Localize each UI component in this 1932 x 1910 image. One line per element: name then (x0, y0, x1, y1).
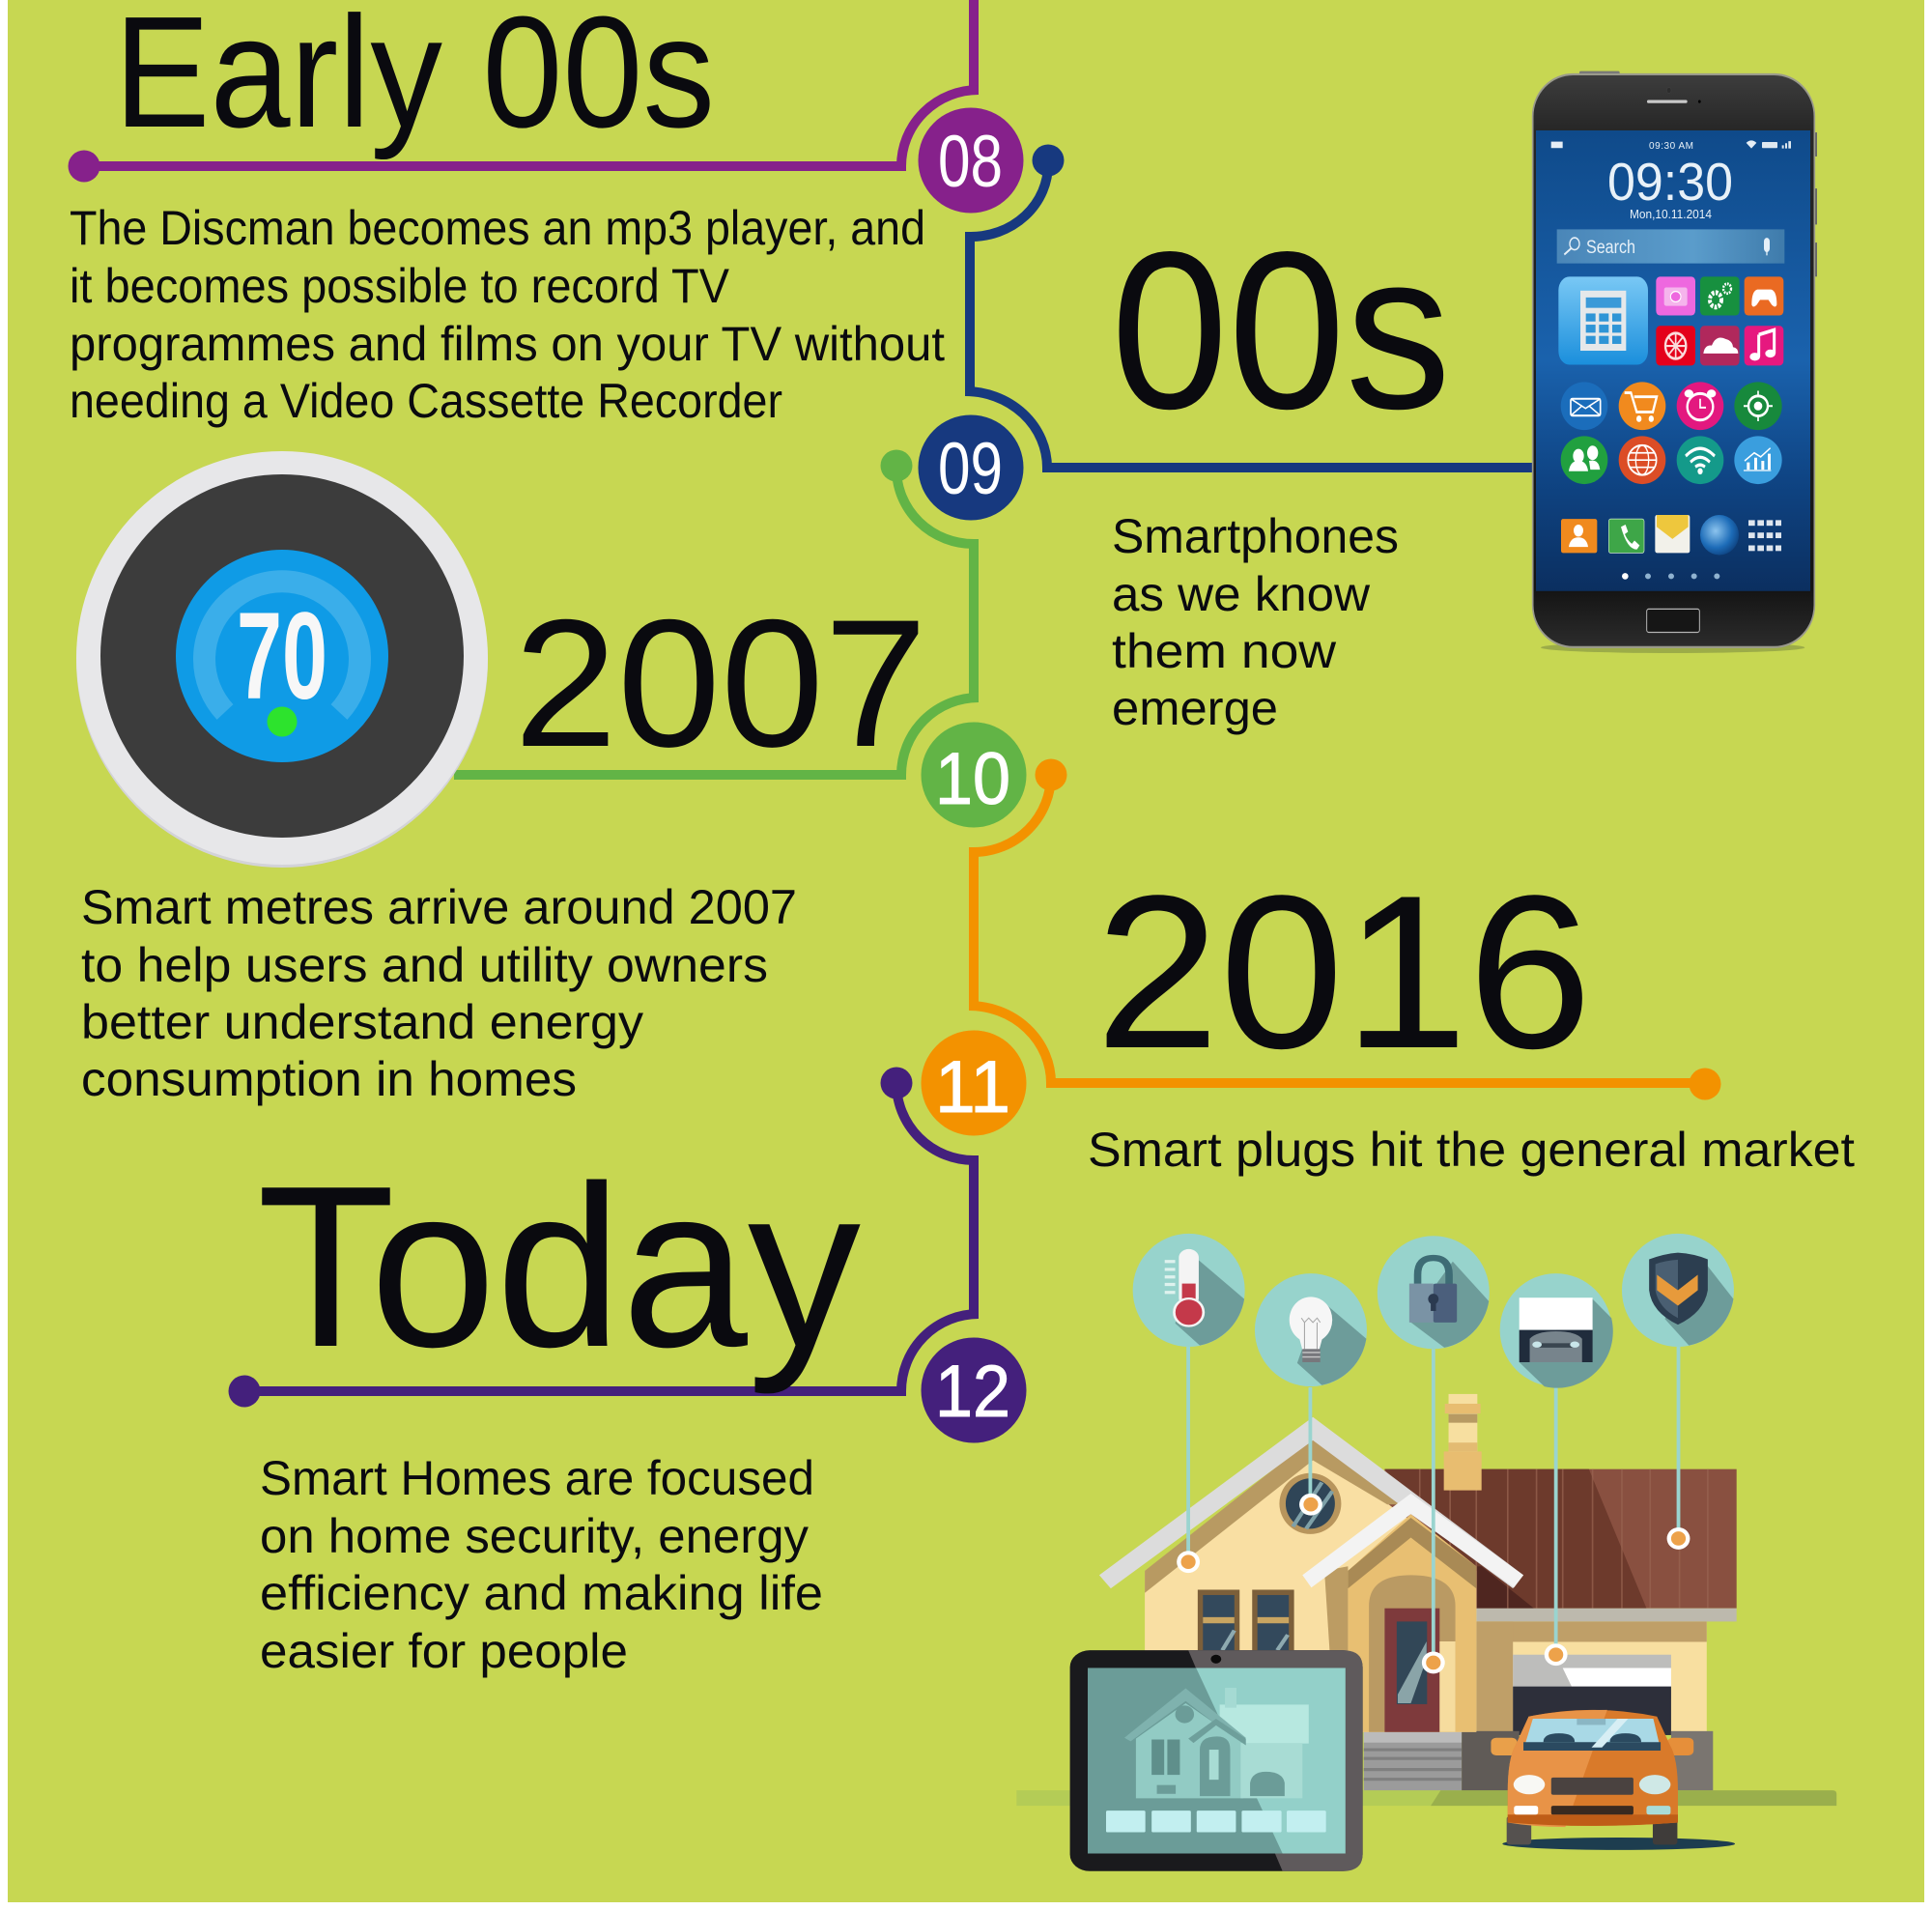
connector: orange 11 (969, 759, 1721, 1099)
badge 11 (922, 1030, 1026, 1136)
icon bubble: garage (1500, 1273, 1613, 1388)
badge 12: 12 (935, 1351, 1010, 1433)
illustration: smart home (1016, 1234, 1836, 1871)
phone screen text: 09:30 (1607, 152, 1733, 212)
text: Smart Homes (260, 1451, 823, 1678)
connection pins (1177, 1494, 1690, 1673)
badge 09 (918, 415, 1024, 520)
badge 11: 11 (935, 1046, 1010, 1128)
round window (1279, 1473, 1341, 1534)
text: Discman description: programmes and films on your TV without (70, 317, 945, 371)
phone shapes (1533, 71, 1817, 653)
phone screen text (1586, 141, 1733, 258)
heading: 2016: 2016 (1095, 849, 1592, 1094)
windows (1198, 1590, 1294, 1654)
text: Smart metres: better understand energy (81, 995, 643, 1049)
text: Smart Homes: Smart Homes are focused (260, 1451, 814, 1505)
text: Smartphones: as we know (1112, 567, 1371, 621)
text: Smart metres: consumption in homes (81, 1052, 577, 1106)
chimney (1444, 1394, 1482, 1491)
badge 09: 09 (938, 428, 1003, 510)
calculator app (1558, 276, 1648, 365)
dock apps (1561, 519, 1597, 553)
text: Discman description: The Discman becomes an mp3 player, and (70, 201, 925, 255)
garage wing (1384, 1469, 1737, 1790)
heading: 2007: 2007 (514, 582, 927, 784)
connector: navy 09 (965, 145, 1538, 468)
connector: green 10 (454, 450, 979, 775)
text: Smartphones: Smartphones (1112, 509, 1399, 563)
ground strip (1016, 1790, 1836, 1806)
square apps (1656, 276, 1695, 316)
connector: purple 08 (68, 0, 979, 182)
connector: deep purple 12 (228, 1067, 979, 1407)
phone screen text: 09:30 AM (1649, 141, 1693, 152)
tablet buttons (1106, 1810, 1326, 1833)
porch gable (1302, 1494, 1523, 1732)
tablet (1070, 1650, 1363, 1871)
text: Smartphones: them now (1112, 624, 1337, 678)
text: Discman description (70, 201, 945, 428)
icon bubble: padlock (1378, 1236, 1490, 1349)
icon: smart thermostat: 70 (237, 587, 327, 726)
icon bubble: shield (1622, 1234, 1734, 1347)
phone screen text: Mon,10.11.2014 (1630, 207, 1712, 221)
text: Smart metres: Smart metres arrive around 2007 (81, 880, 797, 934)
tablet mini house (1124, 1688, 1309, 1798)
heading: Today: Today (257, 1139, 861, 1395)
badge 12 (922, 1337, 1026, 1443)
text: Discman description: needing a Video Cassette Recorder (70, 374, 782, 428)
car (1491, 1710, 1735, 1850)
badge 08 (918, 108, 1024, 213)
connection lines (1188, 1346, 1679, 1662)
main house body (1145, 1439, 1476, 1732)
icon bubble: thermometer (1133, 1234, 1245, 1347)
steps (1364, 1731, 1462, 1790)
badge 08: 08 (938, 121, 1003, 203)
round apps (1561, 382, 1607, 430)
text: Smart plugs: Smart plugs hit the general market (1088, 1123, 1855, 1177)
timeline: connectors (68, 0, 1721, 1407)
main roof (1099, 1417, 1523, 1588)
heading: 00s: 00s (1111, 206, 1451, 456)
icon: smart thermostat (76, 451, 488, 868)
badge 10: 10 (935, 738, 1010, 820)
text: Discman description: it becomes possible to record TV (70, 259, 730, 313)
text: Smart metres: to help users and utility owners (81, 938, 768, 992)
text: Smart Homes: easier for people (260, 1624, 628, 1678)
text: Smart Homes: on home security, energy (260, 1509, 809, 1563)
icon: smartphone (1533, 71, 1817, 653)
text: Smartphones (1112, 509, 1399, 735)
icon bubble: light bulb (1255, 1273, 1367, 1386)
text: Smartphones: emerge (1112, 681, 1278, 735)
badge 10 (922, 723, 1026, 827)
text: Smart Homes: efficiency and making life (260, 1566, 823, 1620)
text: Smart metres (81, 880, 797, 1106)
phone screen text: Search (1586, 238, 1635, 258)
